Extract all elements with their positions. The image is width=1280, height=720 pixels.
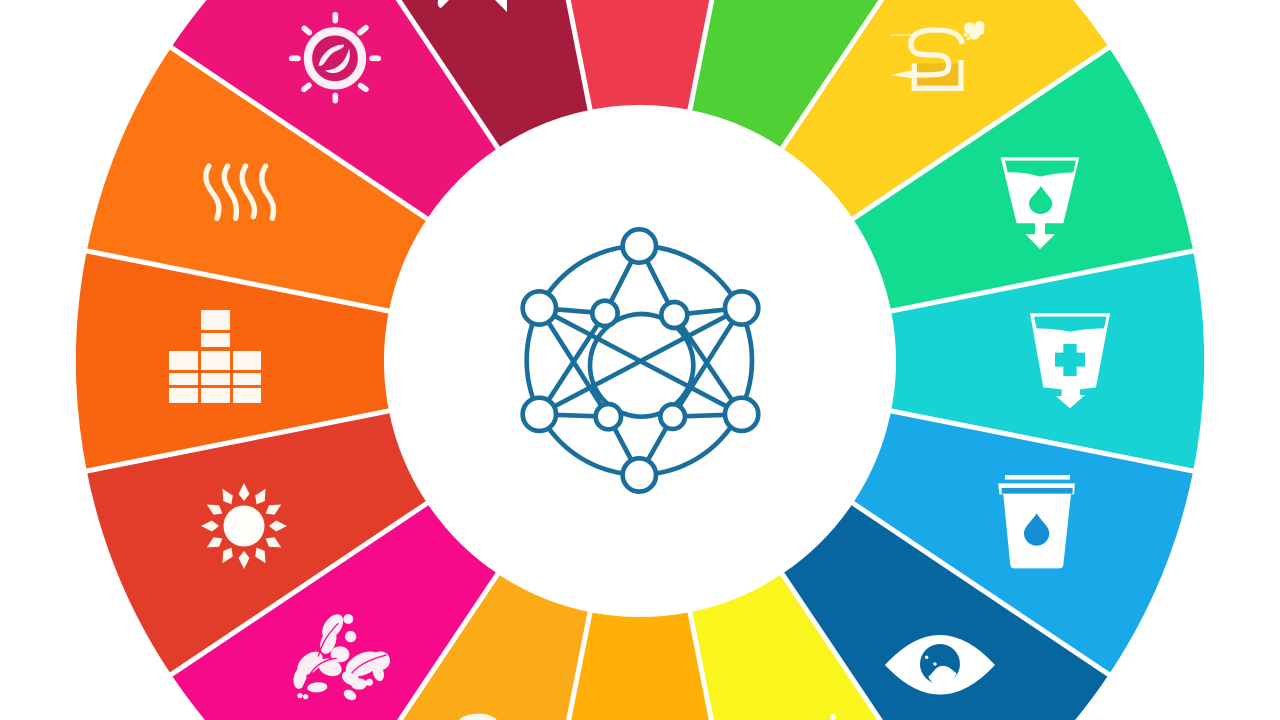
segment: amber bbox=[530, 612, 750, 720]
icon: sun bbox=[201, 483, 287, 569]
icon: funnel cup with cross bbox=[1030, 313, 1110, 408]
segment: sky blue bbox=[853, 411, 1193, 674]
icon: network hub bbox=[523, 229, 758, 492]
segment: green bbox=[690, 0, 953, 148]
segment: cyan bbox=[891, 251, 1204, 471]
segment: navy blue bbox=[782, 503, 1109, 720]
icon: stacked blocks bbox=[169, 310, 261, 403]
icon: water cup bbox=[998, 475, 1075, 568]
segment: hot pink bbox=[171, 503, 498, 720]
segment: red orange bbox=[87, 411, 427, 674]
icon: eye with globe bbox=[885, 635, 995, 695]
icon: crimson segment fragments bbox=[438, 0, 507, 12]
segment: top red bbox=[530, 0, 750, 110]
icon: heat waves bbox=[206, 166, 274, 218]
segment: deep orange bbox=[76, 251, 389, 471]
icon: floral sprigs bbox=[292, 610, 390, 702]
segment: bright yellow bbox=[690, 574, 953, 720]
icon: amber segment fragment bbox=[459, 714, 497, 720]
icon: stylised S with blossom bbox=[890, 21, 985, 88]
segment: orange yellow bbox=[327, 574, 590, 720]
hub: white centre disc bbox=[386, 107, 894, 615]
segment: magenta bbox=[171, 0, 498, 219]
segment: emerald bbox=[853, 48, 1193, 311]
segment: golden yellow bbox=[782, 0, 1109, 219]
icon: funnel cup with drop bbox=[1001, 157, 1079, 249]
icon: sun with lips bbox=[292, 15, 378, 101]
segment: orange bbox=[87, 48, 427, 311]
icon: yellow segment fragment bbox=[830, 714, 836, 720]
segment: crimson bbox=[327, 0, 590, 148]
